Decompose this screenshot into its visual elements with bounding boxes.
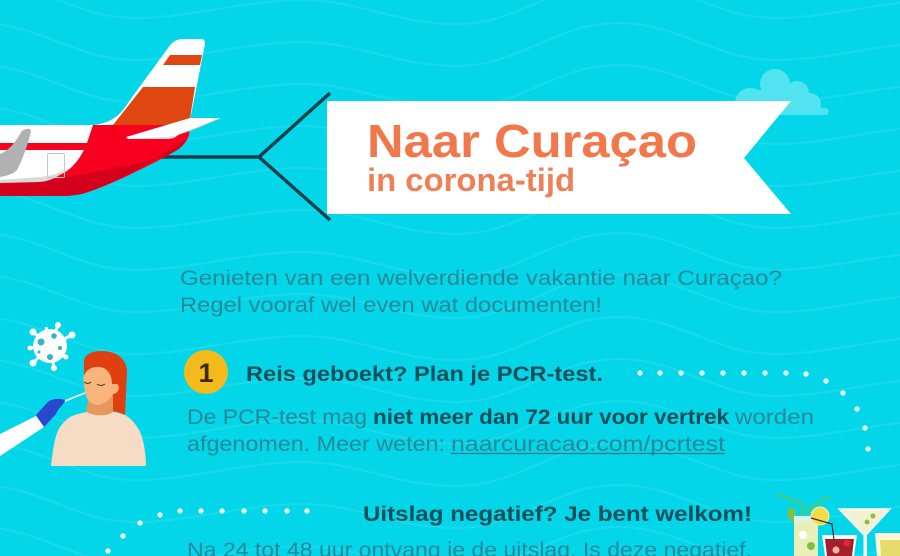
straws: [778, 494, 830, 516]
icon: virus: [28, 322, 76, 371]
illustration: airplane tail: [0, 39, 221, 196]
step 1 number badge: [184, 350, 228, 394]
dotted path left: [105, 508, 310, 554]
yellow glass: [875, 533, 900, 556]
red glass: [822, 535, 857, 556]
tall glass: [794, 516, 818, 556]
glove: [36, 399, 65, 427]
hair: [84, 351, 127, 415]
tow line: [160, 93, 330, 220]
stabilizer: [126, 118, 221, 139]
martini glass: [839, 509, 890, 536]
step 1 body text: naarcuracao.com/pcrtest: [451, 433, 725, 456]
tail stripes: [163, 55, 202, 65]
icon: cloud behind banner: [735, 69, 829, 118]
swab: [65, 393, 85, 401]
step 1 number badge: 1: [198, 358, 214, 388]
step 1 body text: niet meer dan 72 uur voor vertrek: [373, 406, 729, 429]
mint leaf: [788, 507, 796, 522]
wing: [0, 129, 31, 177]
neck: [86, 395, 113, 416]
step 1 heading: Reis geboekt? Plan je PCR-test.: [246, 363, 603, 386]
face: [83, 367, 119, 405]
banner: [327, 101, 791, 214]
step 1 body text: De PCR-test mag: [187, 406, 367, 429]
illustration: person receiving PCR test: [0, 351, 146, 466]
torso: [51, 412, 146, 466]
step 1 body text: afgenomen. Meer weten:: [187, 433, 445, 456]
fuselage: [0, 125, 190, 196]
title: Naar Curaçao: [367, 115, 697, 167]
subtitle: in corona-tijd: [367, 162, 575, 198]
dotted path right: [637, 370, 871, 452]
step 2 heading: Uitslag negatief? Je bent welkom!: [363, 503, 752, 526]
step 1 body text: worden: [734, 406, 814, 429]
arm: [0, 416, 44, 456]
lemon slice: [811, 507, 829, 525]
intro text: Genieten van een welverdiende vakantie naar Curaçao?: [180, 267, 782, 290]
door: [48, 154, 64, 178]
tail fin: [95, 39, 205, 125]
intro text: Regel vooraf wel even wat documenten!: [180, 294, 602, 317]
step 1 body text: [187, 406, 814, 456]
illustration: cocktails: [778, 494, 900, 556]
intro text: [180, 267, 782, 317]
